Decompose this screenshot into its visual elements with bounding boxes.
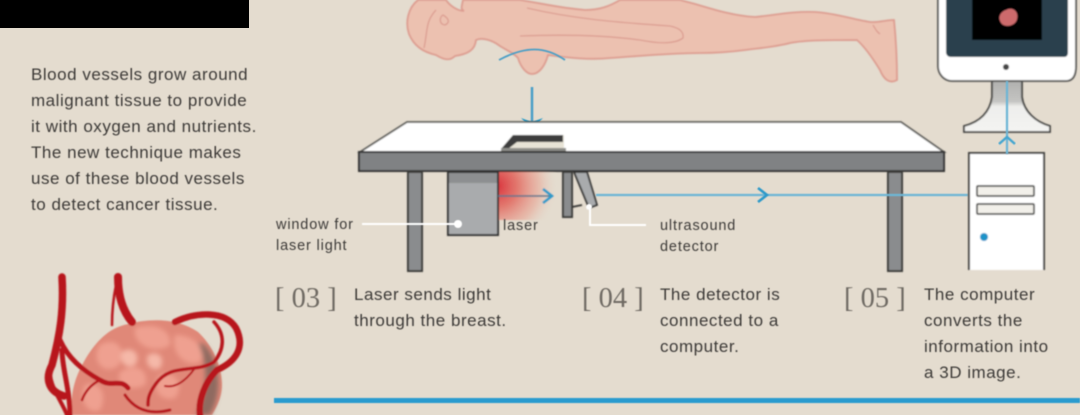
left leg	[408, 172, 422, 271]
label: window for laser light: window for	[275, 217, 354, 233]
label line: window for laser light	[362, 220, 462, 228]
stand	[964, 81, 1050, 132]
laser beam arrow	[498, 189, 552, 203]
label: ultrasound detector	[660, 218, 736, 255]
tumour image	[999, 9, 1017, 26]
step 03: Laser sends light	[354, 285, 491, 304]
blue rule	[274, 398, 1080, 403]
breast opening	[501, 135, 564, 149]
table top	[360, 122, 944, 152]
right leg	[888, 172, 902, 271]
step 05: The computer	[924, 285, 1035, 304]
label line: ultrasound detector	[586, 204, 646, 225]
label: ultrasound detector: detector	[660, 239, 719, 255]
step 05: [ 05 ]	[844, 283, 906, 314]
text block: blood vessels: Blood vessels grow around	[31, 65, 248, 84]
step 04: connected to a	[660, 311, 779, 330]
computer monitor	[938, 0, 1076, 132]
image window	[972, 0, 1042, 40]
step 05: a 3D image.	[924, 363, 1021, 382]
step 04: [ 04 ]	[582, 283, 644, 314]
text block: blood vessels: The new technique makes	[31, 143, 241, 162]
text block: blood vessels: to detect cancer tissue.	[31, 195, 218, 214]
illustration: woman lying on her front	[407, 0, 897, 82]
arrow: tower to monitor	[999, 81, 1015, 154]
step 03	[275, 283, 507, 330]
text block: blood vessels: use of these blood vessels	[31, 169, 245, 188]
laser glow	[498, 172, 558, 220]
black title panel	[0, 0, 249, 28]
step 04: computer.	[660, 337, 739, 356]
logo	[1003, 64, 1009, 70]
monitor case	[938, 0, 1076, 81]
ultrasound detector	[563, 172, 597, 217]
step 03: through the breast.	[354, 311, 507, 330]
text block: blood vessels: it with oxygen and nutrients.	[31, 117, 257, 136]
label: window for laser light: laser light	[276, 238, 347, 254]
illustration: tumour with blood vessels	[48, 277, 240, 415]
label: window for laser light	[275, 217, 354, 254]
scanner arc around breast	[499, 50, 565, 60]
signal line from detector to computer	[596, 188, 968, 202]
step 05	[844, 283, 1049, 382]
step 04	[582, 283, 780, 356]
step 05: information into	[924, 337, 1049, 356]
screen	[946, 0, 1068, 57]
text block: blood vessels: malignant tissue to provide	[31, 91, 247, 110]
step 04: The detector is	[660, 285, 780, 304]
laser box	[448, 172, 498, 235]
label: laser: laser	[503, 218, 539, 234]
computer tower	[969, 153, 1044, 270]
examination table	[359, 122, 944, 271]
label: ultrasound detector: ultrasound	[660, 218, 736, 234]
arrow: breast to table	[521, 87, 543, 129]
table edge	[359, 152, 944, 171]
step 03: [ 03 ]	[275, 283, 337, 314]
text block: blood vessels	[31, 65, 257, 214]
step 05: converts the	[924, 311, 1023, 330]
